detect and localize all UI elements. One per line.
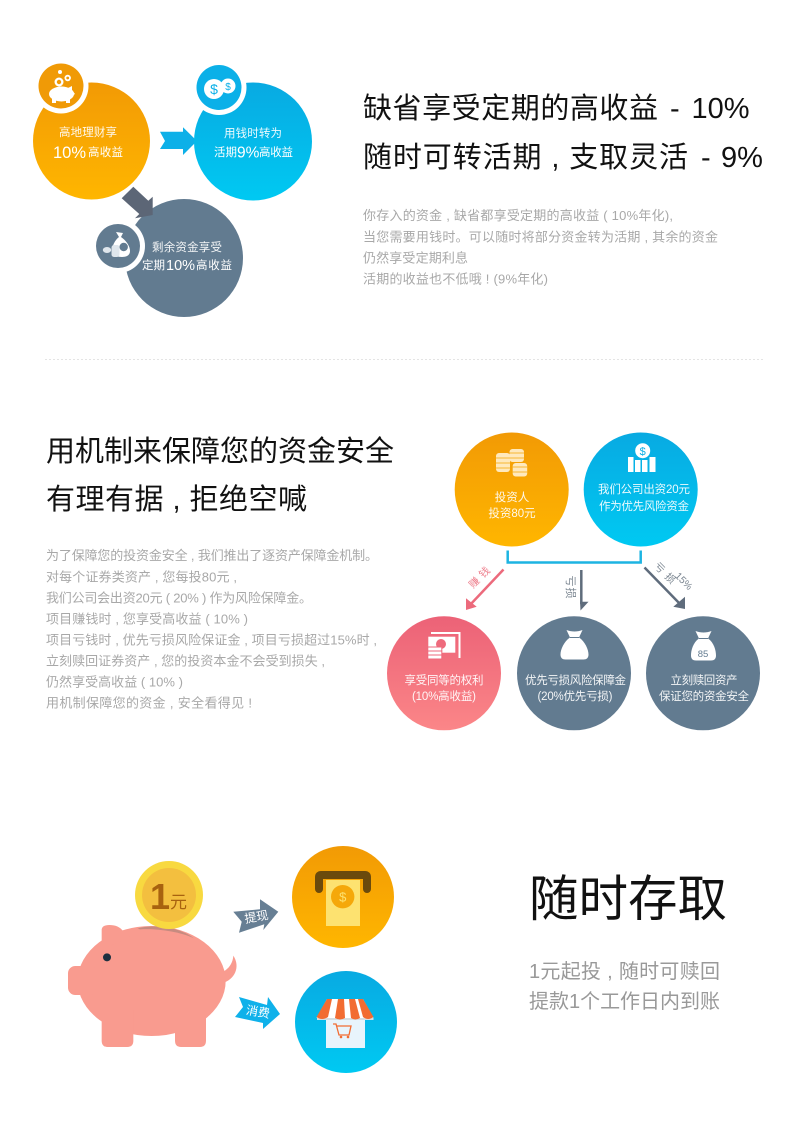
arrow: profit [466, 564, 504, 610]
text block: yield description: 活期的收益也不低哦 ! (9%年化) [363, 272, 548, 286]
circle: company contribution: 我们公司出资20元 [598, 482, 690, 496]
circle: remaining funds: 定期 [142, 258, 165, 272]
circle: remaining funds: 10% [166, 258, 195, 274]
bracket: combined funds [508, 550, 641, 562]
circle: first-loss reserve: 优先亏损风险保障金 [525, 673, 626, 687]
icon: cash withdrawal circle [292, 846, 394, 948]
arrow: loss over 15%: 15% [672, 571, 694, 593]
circle: demand yield: 9% [237, 144, 260, 162]
icon: 1 yuan coin: 1 [150, 876, 170, 917]
heading: safety mechanism [46, 435, 394, 516]
circle: investor: 投资人 [495, 490, 530, 504]
diagram: three yield circles [33, 58, 312, 317]
icon: money bag badge [91, 219, 145, 273]
circle: high fixed yield: 10% [53, 144, 86, 162]
arrow: spending: 消费 [245, 1003, 271, 1021]
text block: yield description: 仍然享受定期利息 [363, 250, 468, 266]
diagram: capital flow [387, 432, 760, 730]
circle: high fixed yield [33, 82, 150, 200]
arrow: withdraw: 提现 [243, 907, 270, 926]
heading: fixed and demand yield: 9% [721, 142, 763, 174]
circle: company contribution: $ [640, 446, 646, 458]
text block: mechanism description: 对每个证券类资产 , 您每投80元 , [46, 570, 237, 584]
heading: fixed and demand yield: 缺省享受定期的高收益 [363, 92, 658, 125]
heading: fixed and demand yield: 10% [692, 93, 750, 125]
circle: high fixed yield: 高地理财享 [59, 125, 117, 139]
circle: demand yield: 高收益 [259, 145, 293, 159]
text block: mechanism description: 项目赚钱时 , 您享受高收益 ( 10% ) [46, 612, 248, 626]
text block: yield description: 当您需要用钱时。可以随时将部分资金转为活期 , 其余的资金 [363, 230, 718, 244]
circle: demand yield: 用钱时转为 [224, 126, 282, 140]
arrow: withdraw [233, 899, 278, 933]
icon: piggy bank badge [34, 58, 88, 114]
circle: remaining funds: 剩余资金享受 [152, 240, 222, 254]
text block: mechanism description: 用机制保障您的资金 , 安全看得见 ! [46, 696, 252, 710]
circle: equal rights [387, 616, 501, 730]
panel: deposit and withdraw section [68, 846, 727, 1073]
text block: mechanism description: 我们公司会出资20元 ( 20% ) 作为风险保障金。 [46, 590, 312, 606]
arrow: loss: 亏损 [564, 576, 578, 598]
icon: shop circle [295, 971, 397, 1073]
arrow: loss over 15%: 亏损 [652, 560, 678, 586]
arrow: profit: 赚钱 [466, 564, 493, 591]
icon: dollar coins badge: $ [225, 82, 231, 93]
heading: fixed and demand yield: - [670, 93, 680, 125]
circle: equal rights: (10%高收益) [412, 689, 476, 703]
icon: dollar coins badge [192, 60, 246, 115]
circle: equal rights: 享受同等的权利 [404, 673, 484, 687]
circle: demand yield [194, 82, 312, 200]
icon: 1 yuan coin: 元 [170, 893, 187, 912]
text block: mechanism description: 立刻赎回证券资产 , 您的投资本金不会受到损失 , [46, 654, 325, 668]
circle: company contribution [584, 432, 698, 546]
circle: demand yield: 活期 [214, 145, 237, 159]
circle: early redemption: 保证您的资金安全 [659, 689, 750, 703]
circle: company contribution: 作为优先风险资金 [599, 499, 690, 513]
text block: deposit terms: 1元起投 , 随时可赎回 [529, 960, 720, 983]
heading: fixed and demand yield: - [701, 142, 711, 174]
text block: mechanism description: 项目亏钱时 , 优先亏损风险保证金 , 项目亏损超过15%时 , [46, 632, 377, 648]
illustration: piggy bank [68, 925, 237, 1047]
circle: early redemption: 85 [698, 649, 708, 660]
panel: flexible yield section [33, 58, 763, 317]
circle: investor: 投资80元 [488, 506, 536, 520]
heading: safety mechanism: 有理有据 , 拒绝空喊 [46, 483, 307, 516]
text block: deposit terms: 提款1个工作日内到账 [529, 990, 720, 1013]
heading: fixed and demand yield: 随时可转活期 , 支取灵活 [363, 141, 688, 174]
circle: early redemption [646, 616, 760, 730]
panel: safety mechanism section [46, 432, 760, 730]
circle: remaining funds [125, 199, 243, 317]
arrow: blue right arrow [160, 127, 197, 155]
circle: first-loss reserve: (20%优先亏损) [538, 689, 613, 703]
icon: dollar coins badge: $ [210, 81, 218, 97]
icon: cash withdrawal circle: $ [339, 890, 347, 904]
text block: yield description [363, 208, 718, 286]
circle: first-loss reserve [517, 616, 631, 730]
arrow: spending [235, 997, 280, 1029]
text block: yield description: 你存入的资金 , 缺省都享受定期的高收益 ( 10%年化), [363, 208, 673, 223]
heading: fixed and demand yield [363, 92, 763, 174]
icon: 1 yuan coin [135, 861, 203, 929]
arrow: gray down-right arrow [122, 187, 153, 218]
heading: safety mechanism: 用机制来保障您的资金安全 [46, 435, 394, 468]
text block: mechanism description [46, 548, 378, 710]
heading: deposit and withdraw anytime: 随时存取 [529, 872, 727, 927]
text block: mechanism description: 仍然享受高收益 ( 10% ) [46, 674, 183, 690]
circle: early redemption: 立刻赎回资产 [670, 673, 738, 687]
circle: investor [455, 432, 569, 546]
arrow: loss [564, 570, 588, 610]
arrow: loss over 15% [644, 560, 694, 609]
text block: deposit terms [529, 960, 720, 1013]
text block: mechanism description: 为了保障您的投资金安全 , 我们推出了逐资产保障金机制。 [46, 548, 378, 563]
circle: high fixed yield: 高收益 [88, 145, 123, 159]
circle: remaining funds: 高收益 [196, 258, 232, 272]
